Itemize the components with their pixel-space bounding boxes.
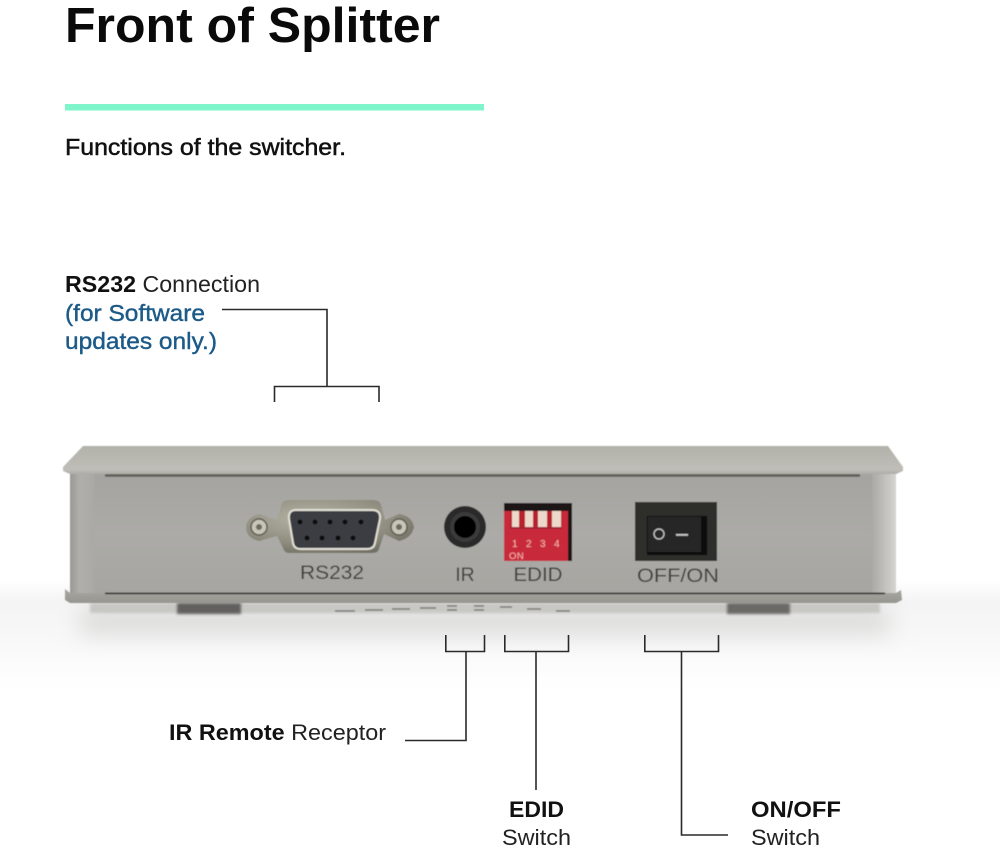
label: EDID switch: EDID <box>509 797 564 822</box>
floor shadow <box>0 580 1000 690</box>
device top lid <box>63 446 903 474</box>
device printed labels <box>300 562 719 587</box>
device printed labels: OFF/ON <box>637 565 719 587</box>
DIP switch: EDID <box>504 503 572 562</box>
label: ON/OFF switch: ON/OFF <box>751 797 841 822</box>
DIP switch: EDID: 3 <box>540 539 546 550</box>
label: IR remote receptor: IR Remote Receptor <box>169 720 387 745</box>
label: RS232 connection: updates only.) <box>65 328 217 354</box>
leader line: EDID bracket <box>505 635 568 790</box>
label: RS232 connection <box>65 271 260 354</box>
DIP switch: EDID: 1 <box>512 539 518 550</box>
rocker switch: power <box>635 502 717 561</box>
device body face <box>70 474 896 596</box>
title: Front of Splitter <box>65 0 440 53</box>
accent bar <box>65 104 484 110</box>
connector: IR jack <box>444 506 486 548</box>
leader line: IR bracket <box>405 635 484 740</box>
label: RS232 connection: (for Software <box>65 300 205 326</box>
subtitle: Functions of the switcher. <box>65 134 346 160</box>
DIP switch: EDID: 4 <box>554 539 560 550</box>
device printed labels: RS232 <box>300 562 364 584</box>
DIP switch: EDID: 2 <box>526 539 532 550</box>
device printed labels: EDID <box>514 564 562 586</box>
label: RS232 connection: RS232 Connection <box>65 271 260 297</box>
leader line: power bracket <box>645 635 728 835</box>
label: ON/OFF switch <box>751 797 841 848</box>
device: splitter front <box>63 446 903 614</box>
device printed labels: IR <box>455 564 475 586</box>
connector: RS232 port <box>246 500 414 553</box>
label: EDID switch <box>502 797 571 848</box>
DIP switch: EDID: ON <box>509 551 524 562</box>
device bottom plate <box>65 589 902 603</box>
device feet <box>90 603 880 614</box>
leader line: RS232 bracket <box>222 310 379 402</box>
